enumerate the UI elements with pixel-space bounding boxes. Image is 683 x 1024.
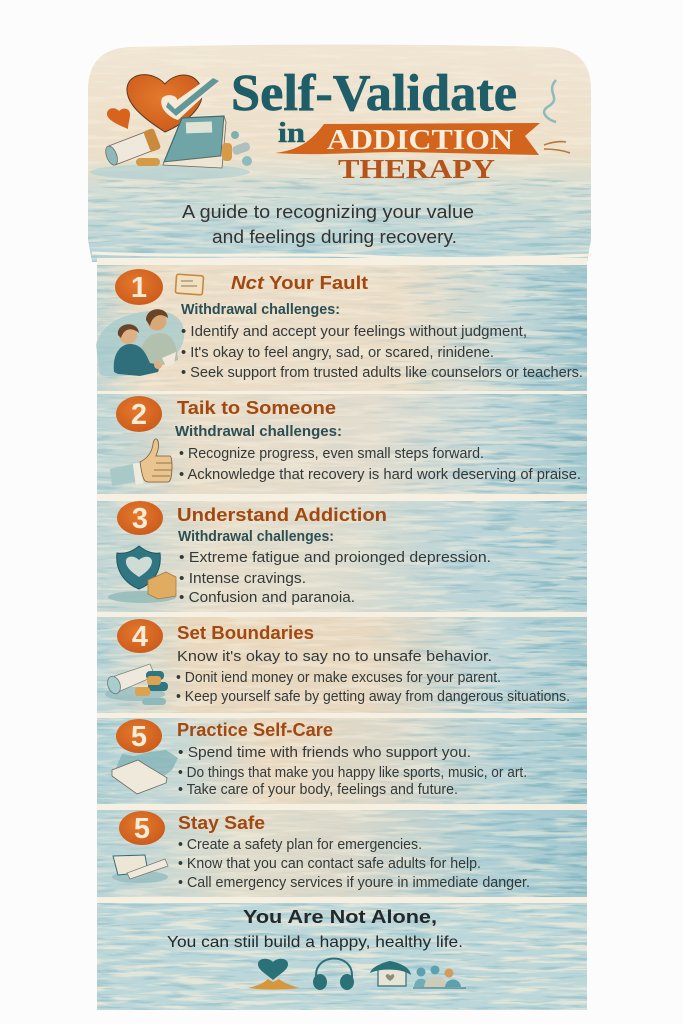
closing heading: You Are Not Alone, (243, 907, 437, 927)
icon: open book (112, 750, 178, 794)
panel: header background (88, 44, 591, 262)
title word: therapy: THERAPY (338, 154, 495, 184)
panel: step 1 (96, 265, 587, 391)
bullet list: • Do things that make you happy like sports, music, or art. (178, 764, 527, 781)
flourish: smoke swirl (544, 80, 556, 122)
bullet list (181, 323, 583, 381)
flourish: banner strokes (544, 142, 570, 153)
icon row (248, 958, 466, 990)
bullet list: • Recognize progress, even small steps forward. (179, 445, 484, 462)
number badge 6: 5 (134, 813, 150, 845)
panel: step 3 (97, 501, 587, 612)
bullet list: • Call emergency services if youre in immediate danger. (178, 874, 530, 891)
number badge 6 (119, 811, 165, 845)
intro line: Know it's okay to say no to unsafe behavior. (177, 648, 492, 665)
subheading: Withdrawal challenges: (178, 528, 334, 545)
banner: addiction (275, 123, 540, 156)
number badge 2: 2 (131, 399, 147, 431)
bullet list: • Identify and accept your feelings without judgment, (181, 323, 527, 340)
panel: step 4 (97, 617, 587, 713)
bullet list: • Know that you can contact safe adults for help. (178, 855, 481, 872)
illustration: two people (96, 309, 184, 376)
number badge 1: 1 (131, 272, 147, 304)
bullet list: • Donit iend money or make excuses for your parent. (176, 669, 501, 686)
bullet list: • Keep yourself safe by getting away from dangerous situations. (176, 688, 570, 705)
number badge 5: 5 (131, 721, 147, 753)
icon: clipboard (175, 274, 204, 295)
bullet list: • Extreme fatigue and proionged depression. (179, 549, 491, 566)
number badge 3: 3 (132, 503, 148, 535)
bullet list: • Take care of your body, feelings and future. (178, 781, 458, 798)
icon: shield and box (108, 546, 176, 603)
bullet list (178, 836, 530, 891)
subtitle second line: and feelings during recovery. (212, 227, 457, 247)
panel: step 6 (97, 810, 587, 897)
subheading: Withdrawal challenges: (181, 301, 340, 318)
bullet list (176, 669, 570, 705)
number badge 5 (116, 719, 162, 753)
number badge 2 (116, 396, 162, 432)
heading: Nct Your Fault (231, 273, 368, 293)
icon: heart in hands (248, 959, 300, 990)
bullet list: • It's okay to feel angry, sad, or scared, rinidene. (181, 344, 494, 361)
cream backing strips between panels (97, 258, 587, 1010)
number badge 1 (115, 269, 163, 305)
icon: headphones (313, 958, 354, 990)
bullet list: • Create a safety plan for emergencies. (178, 836, 422, 853)
heading: Understand Addiction (177, 505, 387, 525)
banner: addiction: ADDICTION (327, 124, 513, 156)
illustration: heart, bottle and journal (90, 75, 252, 180)
bullet list: • Spend time with friends who support you. (178, 744, 471, 761)
number badge 4 (117, 619, 163, 653)
panel: step 5 (97, 718, 587, 804)
heading: Practice Self-Care (177, 720, 333, 740)
icon: pill bottle and pills (105, 664, 168, 705)
subheading: Withdrawal challenges: (175, 423, 342, 440)
heading: Set Boundaries (177, 623, 314, 643)
icon: people (413, 966, 466, 988)
heading: Taik to Someone (177, 398, 336, 418)
icon: home with heart (370, 961, 411, 986)
title word: in: in (278, 117, 305, 149)
wave divider under header (92, 253, 591, 258)
bullet list: • Confusion and paranoia. (179, 589, 355, 606)
number badge 3 (117, 501, 163, 535)
closing line: You can stiil build a happy, healthy life. (167, 934, 463, 951)
panel: footer (97, 903, 587, 1010)
panel: step 2 (97, 394, 587, 494)
icon: papers and scroll (112, 855, 168, 883)
bullet list: • Intense cravings. (179, 570, 306, 587)
bullet list (179, 549, 491, 606)
subtitle: A guide to recognizing your value (182, 202, 474, 222)
heading: Stay Safe (178, 813, 265, 833)
number badge 4: 4 (132, 621, 148, 653)
bullet list (178, 744, 527, 798)
title: Self-Validate (231, 65, 517, 122)
icon: thumbs up (110, 439, 172, 486)
bullet list: • Seek support from trusted adults like counselors or teachers. (181, 364, 583, 381)
bullet list: • Acknowledge that recovery is hard work deserving of praise. (179, 466, 581, 483)
bullet list (179, 445, 581, 483)
title (231, 65, 570, 184)
